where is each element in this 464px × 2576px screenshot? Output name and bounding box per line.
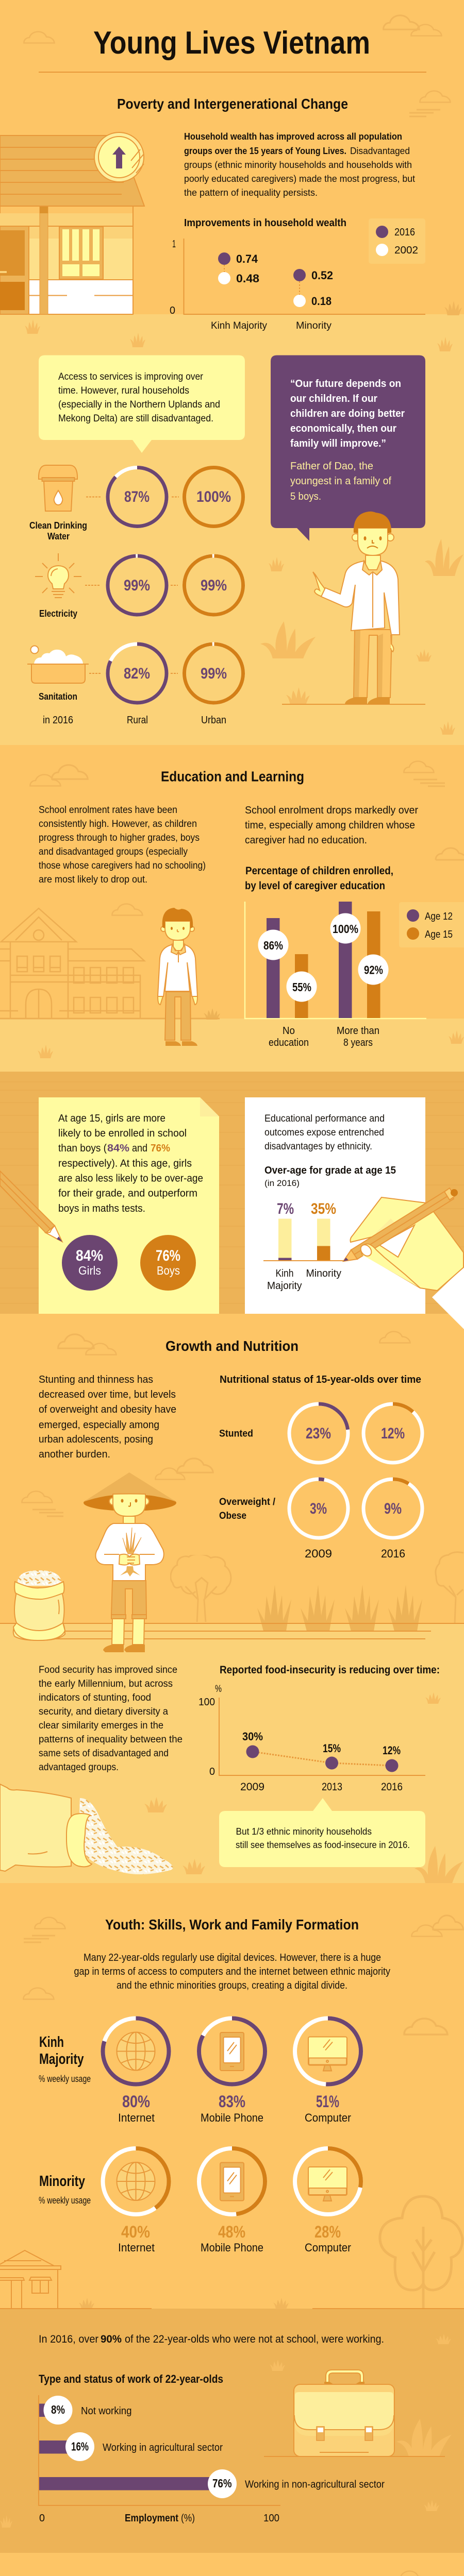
card: girls and boys note: 76% <box>156 1247 180 1264</box>
card: over-age for grade: 7% <box>277 1200 294 1217</box>
callout: access to services: Access to services is improving over <box>58 371 204 382</box>
illustration: school building <box>0 908 220 1019</box>
panel: Kinh Majority digital use: 80% <box>122 2092 150 2111</box>
illustration: farmer <box>84 1472 176 1652</box>
icon: electricity bulb <box>35 553 81 619</box>
text: over 90% working: of the 22-year-olds who were not at school, were working. <box>125 2333 384 2345</box>
chart: improvements in household wealth: 0 <box>170 305 175 316</box>
panel: Kinh Majority digital use: 83% <box>219 2092 245 2111</box>
rings: services access: 99% <box>201 665 227 682</box>
chart: nutritional status: 12% <box>381 1425 405 1442</box>
chart: type and status of work: Working in non-agricultural sector <box>245 2479 385 2490</box>
text: food security: clear similarity emerges in the <box>39 1720 163 1731</box>
text: food security: same sets of disadvantaged and <box>39 1748 169 1759</box>
chart: improvements in household wealth: 0.48 <box>236 272 259 285</box>
chart: improvements in household wealth: 1 <box>172 239 176 250</box>
text: enrolment drops: caregiver had no education. <box>245 835 367 846</box>
text: household wealth: poorly educated caregivers) made the most progress, but <box>184 174 415 184</box>
card: over-age for grade: disadvantages by ethnicity. <box>264 1141 372 1152</box>
panel: Kinh Majority digital use <box>39 2019 361 2124</box>
card: girls and boys note: are also less likely to be over-age <box>58 1173 203 1184</box>
panel: Kinh Majority digital use: Kinh <box>39 2034 64 2050</box>
chart: type and status of work: 100 <box>263 2513 279 2524</box>
chart: reported food insecurity: 100 <box>198 1697 215 1708</box>
text: stunting: urban adolescents, posing <box>39 1434 153 1445</box>
panel: Minority digital use: Internet <box>118 2241 155 2254</box>
rings: services access: Rural <box>127 715 148 726</box>
icon: clean drinking water bucket: Clean Drinking <box>29 520 87 531</box>
quote: father of Dao <box>271 355 425 541</box>
heading: growth: Growth and Nutrition <box>165 1338 299 1354</box>
quote: father of Dao: children are doing better <box>290 408 405 419</box>
chart: reported food insecurity: 12% <box>383 1744 401 1757</box>
chart: type and status of work <box>39 2372 385 2524</box>
text: food security <box>39 1665 183 1773</box>
panel: Minority digital use: % weekly usage <box>39 2195 91 2206</box>
chart: nutritional status: Nutritional status of 15-year-olds over time <box>220 1374 421 1385</box>
ring: electricity rural 99% <box>107 555 167 615</box>
icon: clean drinking water bucket <box>29 465 87 541</box>
panel: Kinh Majority digital use: Mobile Phone <box>201 2111 263 2124</box>
text: household wealth: groups (ethnic minority households and households with <box>184 160 412 170</box>
text: digital devices: Many 22-year-olds regularly use digital devices. However, there is a huge <box>84 1952 381 1963</box>
card: over-age for grade <box>245 1097 425 1314</box>
text: stunting: decreased over time, but levels <box>39 1389 176 1400</box>
panel: Minority digital use <box>39 2148 361 2254</box>
illustration: house with coin <box>0 132 144 314</box>
text: enrolment rates: progress through to higher grades, boys <box>39 833 200 843</box>
chart: enrolment by caregiver education: No <box>283 1025 295 1037</box>
chart: enrolment by caregiver education: Age 12 <box>425 911 453 922</box>
illustration: left pencil <box>0 1171 62 1242</box>
chart: enrolment by caregiver education: 8 years <box>343 1037 373 1048</box>
chart: improvements in household wealth: Improvements in household wealth <box>184 217 346 229</box>
text: enrolment drops: School enrolment drops markedly over <box>245 805 418 816</box>
illustration: boy <box>158 908 197 1046</box>
chart: enrolment by caregiver education: 92% <box>364 963 383 977</box>
chart: improvements in household wealth: 2002 <box>394 245 418 256</box>
chart: reported food insecurity: % <box>215 1684 222 1694</box>
chart: reported food insecurity: 2009 <box>240 1781 264 1793</box>
illustration: father figure <box>282 512 425 704</box>
chart: nutritional status: 2009 <box>305 1547 332 1560</box>
text: enrolment rates: consistently high. However, as children <box>39 819 197 829</box>
illustration: small house and ground line <box>0 2250 464 2309</box>
text: household wealth: Household wealth has improved across all population <box>184 131 402 142</box>
chart: nutritional status <box>219 1374 422 1560</box>
chart: reported food insecurity: 0 <box>209 1766 215 1777</box>
card: over-age for grade: 35% <box>311 1200 336 1217</box>
text: household wealth <box>184 131 415 198</box>
card: over-age for grade: Majority <box>267 1280 302 1292</box>
callout: ethnic minority households: still see themselves as food-insecure in 2016. <box>236 1840 410 1850</box>
text: enrolment drops: time, especially among children whose <box>245 820 415 831</box>
card: over-age for grade: Minority <box>306 1268 341 1279</box>
chart: enrolment by caregiver education: by level of caregiver education <box>245 880 385 892</box>
panel: Minority digital use: 40% <box>121 2223 150 2241</box>
panel: Kinh Majority digital use: Internet <box>118 2111 155 2124</box>
chart: enrolment by caregiver education: More than <box>337 1025 379 1037</box>
callout: access to services: time. However, rural households <box>58 385 189 396</box>
quote: father of Dao: youngest in a family of <box>290 476 391 487</box>
chart: improvements in household wealth: Kinh Majority <box>211 320 267 331</box>
text: stunting <box>39 1374 176 1460</box>
text: stunting: of overweight and obesity have <box>39 1404 176 1415</box>
chart: reported food insecurity: Reported food-insecurity is reducing over time: <box>220 1664 440 1676</box>
text: food security: advantaged groups. <box>39 1762 119 1773</box>
text: stunting: Stunting and thinness has <box>39 1374 153 1385</box>
chart: enrolment by caregiver education: Age 15 <box>425 929 453 940</box>
chart: reported food insecurity <box>198 1664 440 1793</box>
heading: poverty: Poverty and Intergenerational Change <box>117 96 348 112</box>
chart: nutritional status: 23% <box>306 1425 331 1442</box>
panel: Minority digital use: Computer <box>305 2241 351 2254</box>
rings: services access: 87% <box>124 488 150 505</box>
illustration: briefcase <box>264 2370 452 2456</box>
chart: enrolment by caregiver education: 100% <box>333 922 358 936</box>
text: over 90% working: In 2016, over <box>39 2333 98 2345</box>
chart: reported food insecurity: 30% <box>242 1730 263 1743</box>
chart: enrolment by caregiver education: Percentage of children enrolled, <box>245 865 393 877</box>
card: over-age for grade: Kinh <box>275 1268 294 1279</box>
card: over-age for grade: Educational performance and <box>264 1113 385 1124</box>
ring: water urban 100% <box>185 468 243 527</box>
panel: Kinh Majority digital use: Computer <box>305 2111 351 2124</box>
chart: improvements in household wealth: Minority <box>296 320 332 331</box>
chart: type and status of work: Working in agricultural sector <box>103 2442 223 2453</box>
icon: sanitation bowl: Sanitation <box>39 691 77 702</box>
card: girls and boys note: and <box>132 1143 147 1154</box>
illustration: small rice sack <box>13 1570 65 1640</box>
title: Young Lives Vietnam <box>93 25 370 61</box>
rings: services access <box>43 468 243 726</box>
text: enrolment rates: those whose caregivers had no schooling) <box>39 860 206 871</box>
quote: father of Dao: our children. If our <box>290 393 377 404</box>
chart: enrolment by caregiver education <box>245 865 464 1048</box>
quote: father of Dao: “Our future depends on <box>290 378 401 389</box>
ring: sanitation rural 82% <box>108 644 167 703</box>
text: enrolment rates <box>39 805 206 885</box>
callout: ethnic minority households <box>219 1798 425 1867</box>
quote: father of Dao: Father of Dao, the <box>290 461 373 472</box>
chart: nutritional status: 9% <box>384 1500 402 1517</box>
callout: access to services: Mekong Delta) are still disadvantaged. <box>58 413 213 424</box>
icon: clean drinking water bucket: Water <box>47 531 70 541</box>
panel: Kinh Majority digital use: % weekly usage <box>39 2074 91 2084</box>
text: food security: Food security has improved since <box>39 1665 177 1675</box>
ring: sanitation urban 99% <box>184 643 243 703</box>
card: over-age for grade: (in 2016) <box>264 1178 300 1188</box>
text: food security: security, and dietary diversity a <box>39 1706 168 1717</box>
card: girls and boys note: respectively). At this age, girls <box>58 1158 192 1170</box>
icon: electricity bulb: Electricity <box>39 608 77 619</box>
card: over-age for grade: Over-age for grade at age 15 <box>264 1165 396 1176</box>
card: girls and boys note: 76% <box>151 1143 170 1154</box>
chart: nutritional status: Obese <box>219 1511 246 1521</box>
card: girls and boys note <box>39 1097 219 1314</box>
text: household wealth: the pattern of inequality persists. <box>184 188 318 198</box>
card: girls and boys note: Boys <box>157 1264 180 1277</box>
text: food security: the early Millennium, but across <box>39 1679 173 1689</box>
quote: father of Dao: 5 boys. <box>290 491 321 502</box>
chart: improvements in household wealth: 2016 <box>394 227 415 238</box>
chart: nutritional status: Overweight / <box>219 1497 276 1507</box>
chart: enrolment by caregiver education: 86% <box>263 939 283 952</box>
text: stunting: emerged, especially among <box>39 1419 159 1431</box>
chart: type and status of work: (%) <box>181 2513 195 2524</box>
chart: improvements in household wealth: 0.52 <box>311 269 333 282</box>
callout: access to services <box>39 355 245 453</box>
quote: father of Dao: economically, then our <box>290 423 396 434</box>
card: girls and boys note: boys in maths tests. <box>58 1203 145 1214</box>
card: girls and boys note: Girls <box>78 1264 101 1277</box>
text: stunting: another burden. <box>39 1449 110 1460</box>
chart: type and status of work: Employment <box>125 2513 178 2524</box>
chart: nutritional status: Stunted <box>219 1428 253 1439</box>
text: enrolment rates: are most likely to drop out. <box>39 874 147 885</box>
text: digital devices <box>74 1952 390 1991</box>
chart: type and status of work: 8% <box>51 2403 65 2416</box>
card: girls and boys note: likely to be enrolled in school <box>58 1128 187 1139</box>
panel: Minority digital use: Minority <box>39 2173 85 2190</box>
chart: type and status of work: Type and status of work of 22-year-olds <box>39 2372 223 2385</box>
card: girls and boys note: At age 15, girls are more <box>58 1113 165 1124</box>
text: digital devices: gap in terms of access to computers and the internet between ethnic majority <box>74 1966 390 1977</box>
rings: services access: Urban <box>201 715 226 726</box>
chart: type and status of work: 0 <box>39 2513 45 2524</box>
chart: improvements in household wealth <box>170 217 425 331</box>
illustration: spilled rice sack <box>0 1784 173 1874</box>
icon: sanitation bowl <box>27 646 89 702</box>
heading: youth: Youth: Skills, Work and Family Formation <box>105 1917 359 1933</box>
panel: Minority digital use: Mobile Phone <box>201 2241 263 2254</box>
panel: Minority digital use: 48% <box>218 2223 245 2241</box>
heading: education: Education and Learning <box>161 769 304 784</box>
text: enrolment drops <box>245 805 418 846</box>
text: food security: patterns of inequality between the <box>39 1734 183 1745</box>
panel: Minority digital use: 28% <box>314 2223 341 2241</box>
card: girls and boys note: 84% <box>107 1143 129 1154</box>
rings: services access: 99% <box>124 577 150 594</box>
rings: services access: 100% <box>196 488 231 505</box>
chart: reported food insecurity: 2013 <box>322 1781 342 1793</box>
text: household wealth: Disadvantaged <box>350 146 410 156</box>
chart: type and status of work: Not working <box>81 2405 132 2417</box>
card: girls and boys note: than boys ( <box>58 1143 107 1154</box>
text: household wealth: groups over the 15 years of Young Lives. <box>184 146 346 156</box>
panel: Kinh Majority digital use: Majority <box>39 2051 84 2067</box>
chart: improvements in household wealth: 0.18 <box>311 295 332 308</box>
chart: type and status of work: 16% <box>71 2440 89 2453</box>
chart: nutritional status: 3% <box>310 1500 327 1517</box>
chart: enrolment by caregiver education: 55% <box>292 980 311 994</box>
ring: water rural 87% <box>108 468 167 527</box>
illustration: hand holding pencil <box>343 1188 464 1329</box>
text: enrolment rates: and disadvantaged groups (especially <box>39 846 188 857</box>
card: girls and boys note: 84% <box>76 1247 103 1264</box>
callout: access to services: (especially in the Northern Uplands and <box>58 399 220 410</box>
text: enrolment rates: School enrolment rates have been <box>39 805 177 816</box>
rings: services access: 82% <box>124 665 150 682</box>
chart: reported food insecurity: 15% <box>323 1742 341 1755</box>
panel: Kinh Majority digital use: 51% <box>316 2092 339 2111</box>
quote: father of Dao: family will improve.” <box>290 438 386 449</box>
chart: reported food insecurity: 2016 <box>381 1781 403 1793</box>
chart: enrolment by caregiver education: education <box>269 1037 309 1048</box>
text: over 90% working: 90% <box>101 2333 122 2345</box>
rings: services access: 99% <box>201 577 227 594</box>
card: girls and boys note: for their grade, and outperform <box>58 1188 197 1199</box>
card: over-age for grade: outcomes expose entrenched <box>264 1127 384 1138</box>
rings: services access: in 2016 <box>43 715 73 726</box>
chart: nutritional status: 2016 <box>381 1547 405 1560</box>
text: food security: indicators of stunting, food <box>39 1692 151 1703</box>
ring: electricity urban 99% <box>184 555 243 615</box>
illustration: field lines <box>0 1623 464 1639</box>
text: digital devices: and the ethnic minorities groups, creating a digital divide. <box>117 1980 347 1991</box>
chart: type and status of work: 76% <box>212 2477 232 2490</box>
callout: ethnic minority households: But 1/3 ethnic minority households <box>236 1826 372 1837</box>
chart: improvements in household wealth: 0.74 <box>236 252 258 265</box>
